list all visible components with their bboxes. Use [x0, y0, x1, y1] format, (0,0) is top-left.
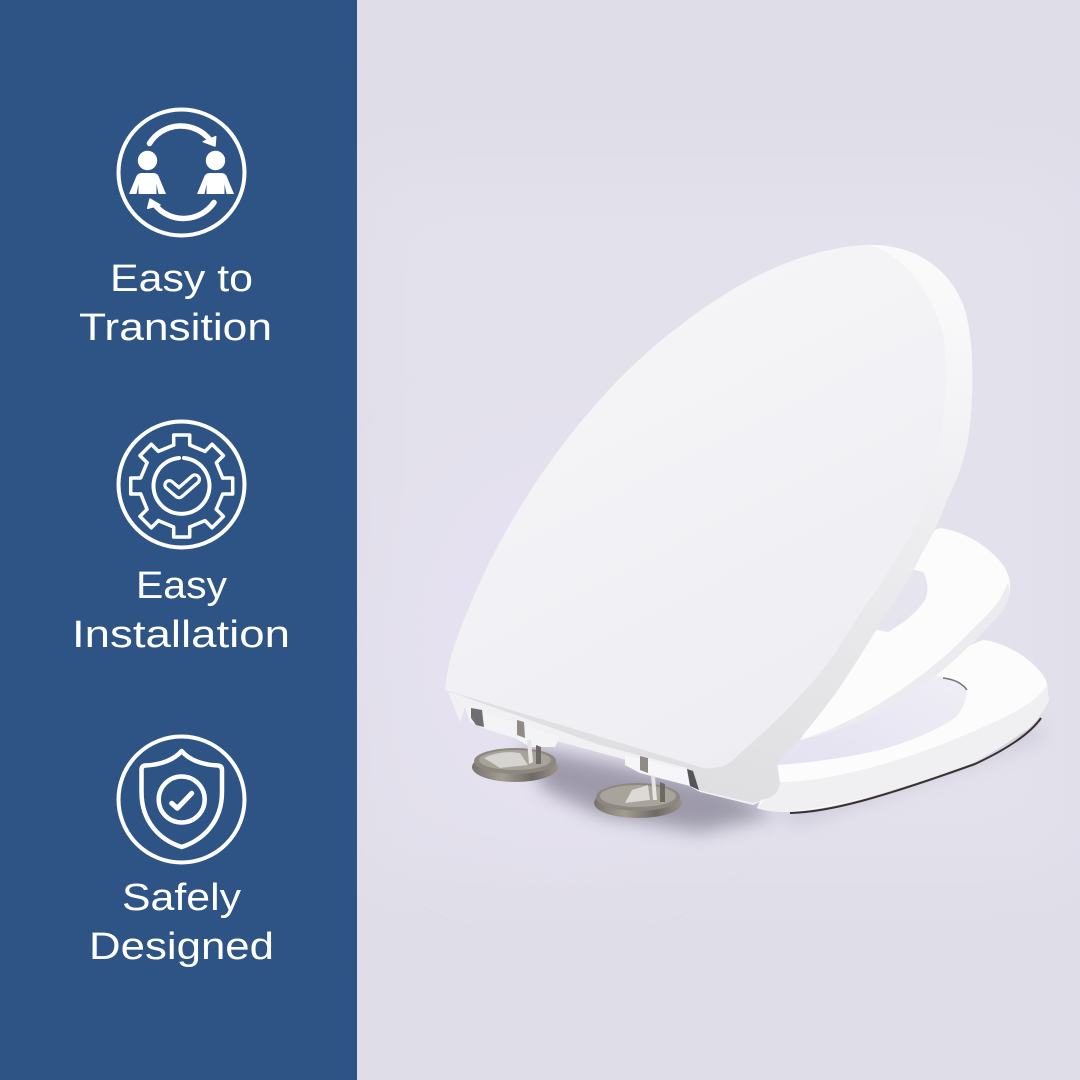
icon: two people with swap arrows [118, 110, 244, 236]
background [357, 0, 1080, 1080]
hinge blocks [465, 707, 560, 747]
lid [445, 245, 973, 805]
label [89, 877, 274, 968]
lid rim [445, 245, 973, 803]
feature: safely designed [89, 736, 274, 968]
label [72, 565, 290, 656]
left knob [472, 752, 558, 782]
upper child seat ring [800, 528, 1010, 740]
product photo: toilet seat [445, 245, 1049, 832]
label: Easy to [110, 258, 253, 300]
upper seat opening [868, 565, 928, 632]
label: Safely [122, 877, 241, 919]
label: Installation [72, 614, 290, 656]
floor shadow [520, 722, 1040, 832]
icon: gear with check [118, 422, 244, 548]
rollers and pins [471, 708, 484, 727]
label: Designed [89, 926, 274, 968]
label: Transition [79, 307, 272, 349]
label: Easy [136, 565, 227, 607]
icon: shield with check [118, 736, 244, 862]
feature: easy installation [72, 422, 290, 656]
lower seat opening [777, 676, 966, 765]
lid face [445, 245, 946, 768]
lower seat ring [757, 640, 1049, 813]
label [79, 258, 272, 349]
hinge strip under lid [448, 692, 780, 805]
feature: easy to transition [79, 110, 272, 349]
right knob [594, 788, 682, 818]
hinges [465, 707, 699, 818]
left feature panel [0, 0, 357, 1080]
